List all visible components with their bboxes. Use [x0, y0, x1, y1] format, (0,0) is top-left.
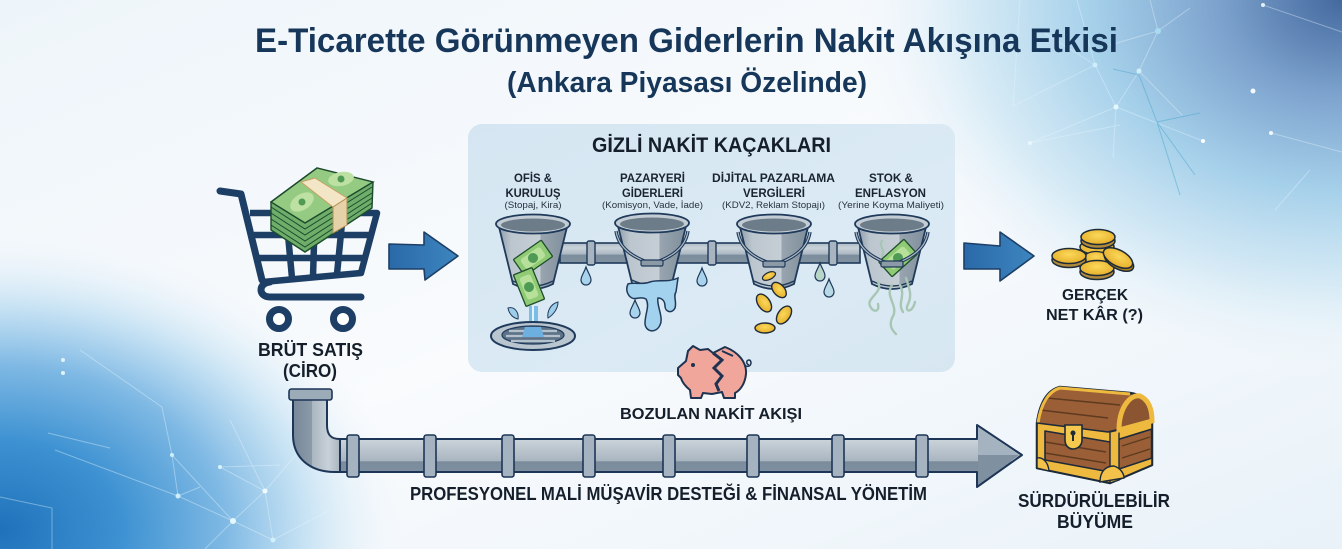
icon: broken piggy bank	[678, 346, 751, 398]
leak 2: marketplace costs: (Komisyon, Vade, İade)	[602, 200, 703, 211]
label: sustainable growth	[1018, 491, 1170, 532]
leak 1: office and setup: (Stopaj, Kira)	[504, 200, 562, 211]
icon: shopping cart with cash	[220, 168, 377, 328]
panel heading: GİZLİ NAKİT KAÇAKLARI	[592, 134, 831, 157]
connecting pipe	[560, 241, 860, 297]
leak 1: office and setup: OFİS &	[514, 170, 552, 185]
leak 3: digital marketing taxes: VERGİLERİ	[743, 185, 805, 200]
label: gross sales: BRÜT SATIŞ	[258, 340, 363, 360]
label: real net profit: NET KÂR (?)	[1046, 306, 1143, 324]
leak 4: stock and inflation: STOK &	[869, 171, 913, 185]
label: real net profit: GERÇEK	[1062, 287, 1129, 304]
label: professional accounting support: PROFESYONEL MALİ MÜŞAVİR DESTEĞİ & FİNANSAL YÖNETİM	[410, 483, 927, 504]
arrow: leaks to net profit	[964, 232, 1034, 281]
leak 3: digital marketing taxes: (KDV2, Reklam Stopajı)	[722, 200, 825, 211]
leak 2: marketplace costs: GİDERLERİ	[622, 185, 683, 200]
leak 4: stock and inflation: (Yerine Koyma Maliyeti)	[838, 200, 944, 211]
label: real net profit	[1046, 287, 1143, 324]
label: sustainable growth: BÜYÜME	[1057, 512, 1133, 532]
arrow: professional support pipeline	[289, 389, 1022, 487]
title	[255, 22, 1118, 99]
leak 4: stock and inflation	[838, 171, 944, 334]
label: sustainable growth: SÜRDÜRÜLEBİLİR	[1018, 491, 1170, 511]
panel: hidden cash leaks	[468, 124, 955, 372]
leak 4: stock and inflation: ENFLASYON	[855, 186, 926, 200]
label: disrupted cash flow: BOZULAN NAKİT AKIŞI	[620, 405, 802, 423]
label: gross sales	[258, 340, 363, 381]
leak 3: digital marketing taxes: DİJİTAL PAZARLAMA	[712, 170, 835, 185]
leak 2: marketplace costs: PAZARYERİ	[620, 170, 685, 185]
icon: cash stack	[271, 168, 373, 252]
leak 1: office and setup: KURULUŞ	[506, 186, 560, 200]
title: (Ankara Piyasası Özelinde)	[507, 66, 867, 99]
title: E-Ticarette Görünmeyen Giderlerin Nakit Akışına Etkisi	[255, 22, 1118, 60]
leak 1: office and setup	[491, 170, 575, 350]
icon: gold coins	[1052, 230, 1137, 280]
arrow: sales to leaks	[389, 232, 458, 280]
icon: treasure chest	[1037, 387, 1152, 483]
leak 2: marketplace costs	[602, 170, 703, 331]
leak 3: digital marketing taxes	[712, 170, 835, 333]
label: gross sales: (CİRO)	[283, 361, 337, 381]
